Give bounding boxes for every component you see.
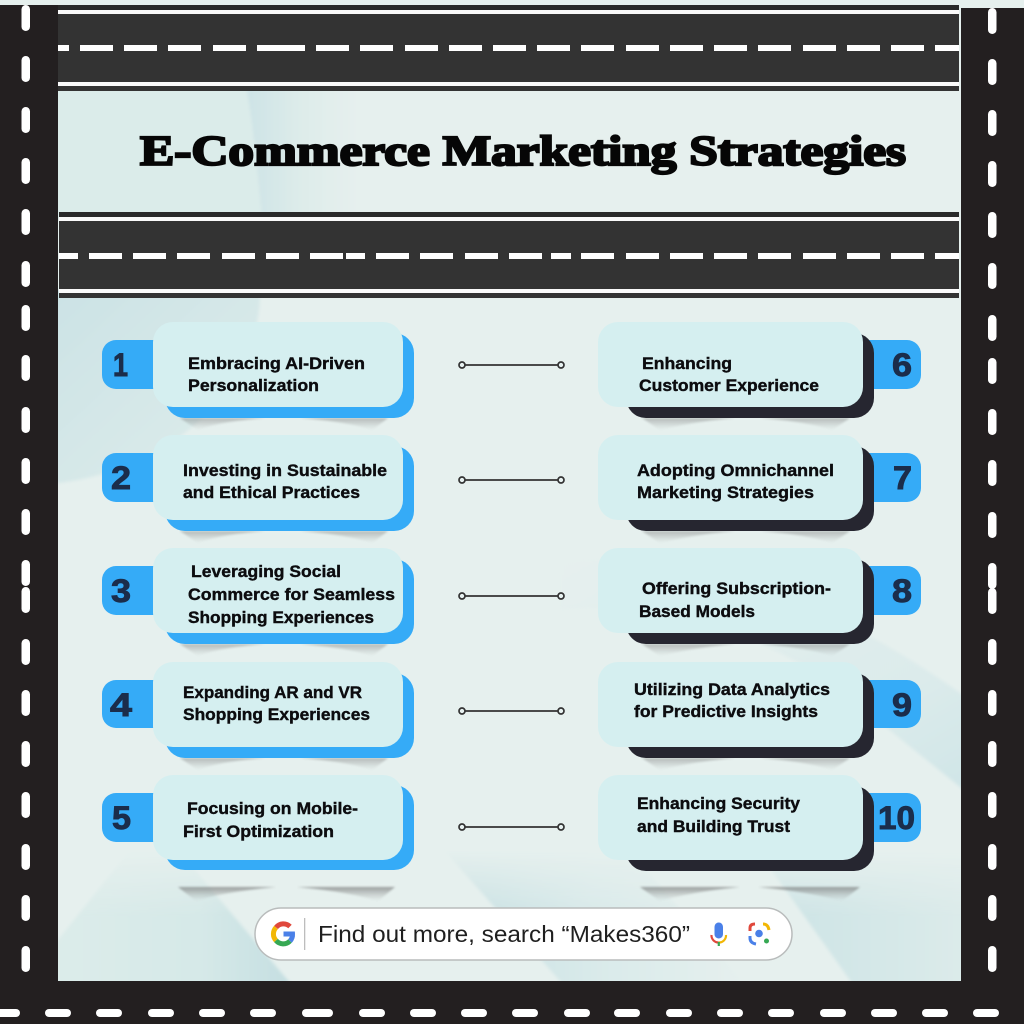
icon: microphone (711, 922, 726, 946)
item 10 (598, 775, 921, 901)
item 6: 6 (892, 347, 912, 383)
item 4: Expanding AR and VR (183, 683, 362, 702)
border: left road (0, 5, 58, 1024)
item 1: 1 (113, 347, 128, 383)
item 8: Based Models (639, 602, 755, 621)
item 1: Embracing AI-Driven (188, 354, 365, 373)
item 2: and Ethical Practices (183, 483, 360, 502)
item 10: Enhancing Security (637, 794, 801, 813)
item 2: Investing in Sustainable (183, 461, 387, 480)
item 9: Utilizing Data Analytics (634, 680, 830, 699)
item 1: Personalization (188, 376, 319, 395)
item 5 (102, 775, 414, 901)
connector 5 (459, 824, 564, 830)
item 3: Leveraging Social (191, 562, 341, 581)
connector 4 (459, 708, 564, 714)
connector 1 (459, 362, 564, 368)
item 9: for Predictive Insights (634, 702, 818, 721)
search bar (255, 908, 792, 960)
item 4: Shopping Experiences (183, 705, 370, 724)
item 6: Enhancing (642, 354, 732, 373)
item 7: Adopting Omnichannel (637, 461, 834, 480)
item 4 (102, 662, 414, 770)
connector 2 (459, 477, 564, 483)
title: E-Commerce Marketing Strategies (140, 129, 906, 175)
icon: Google G (273, 924, 293, 944)
item 9 (598, 662, 921, 770)
item 8 (598, 548, 921, 656)
item 2: 2 (111, 460, 131, 496)
icon: lens (750, 924, 769, 944)
item 3: 3 (111, 573, 131, 609)
item 10: 10 (878, 800, 915, 836)
road: second (59, 212, 959, 298)
item 9: 9 (892, 687, 912, 723)
item 10: and Building Trust (637, 817, 790, 836)
item 1 (102, 322, 414, 430)
border: right road (961, 8, 1024, 1024)
item 6 (598, 322, 921, 430)
page background (58, 91, 961, 981)
item 4: 4 (110, 687, 132, 723)
item 3: Commerce for Seamless (188, 585, 395, 604)
item 7 (598, 435, 921, 543)
item 5: Focusing on Mobile- (187, 799, 358, 818)
road: top (58, 5, 959, 91)
item 3: Shopping Experiences (188, 608, 374, 627)
border: bottom road (0, 981, 1024, 1024)
item 7: Marketing Strategies (637, 483, 814, 502)
item 3 (102, 548, 414, 656)
item 2 (102, 435, 414, 543)
item 5: 5 (112, 800, 131, 836)
item 7: 7 (893, 460, 912, 496)
item 5: First Optimization (183, 822, 334, 841)
item 8: Offering Subscription- (642, 579, 831, 598)
search text: Find out more, search “Makes360” (318, 921, 690, 947)
item 8: 8 (892, 573, 912, 609)
item 6: Customer Experience (639, 376, 819, 395)
connector 3 (459, 593, 564, 599)
